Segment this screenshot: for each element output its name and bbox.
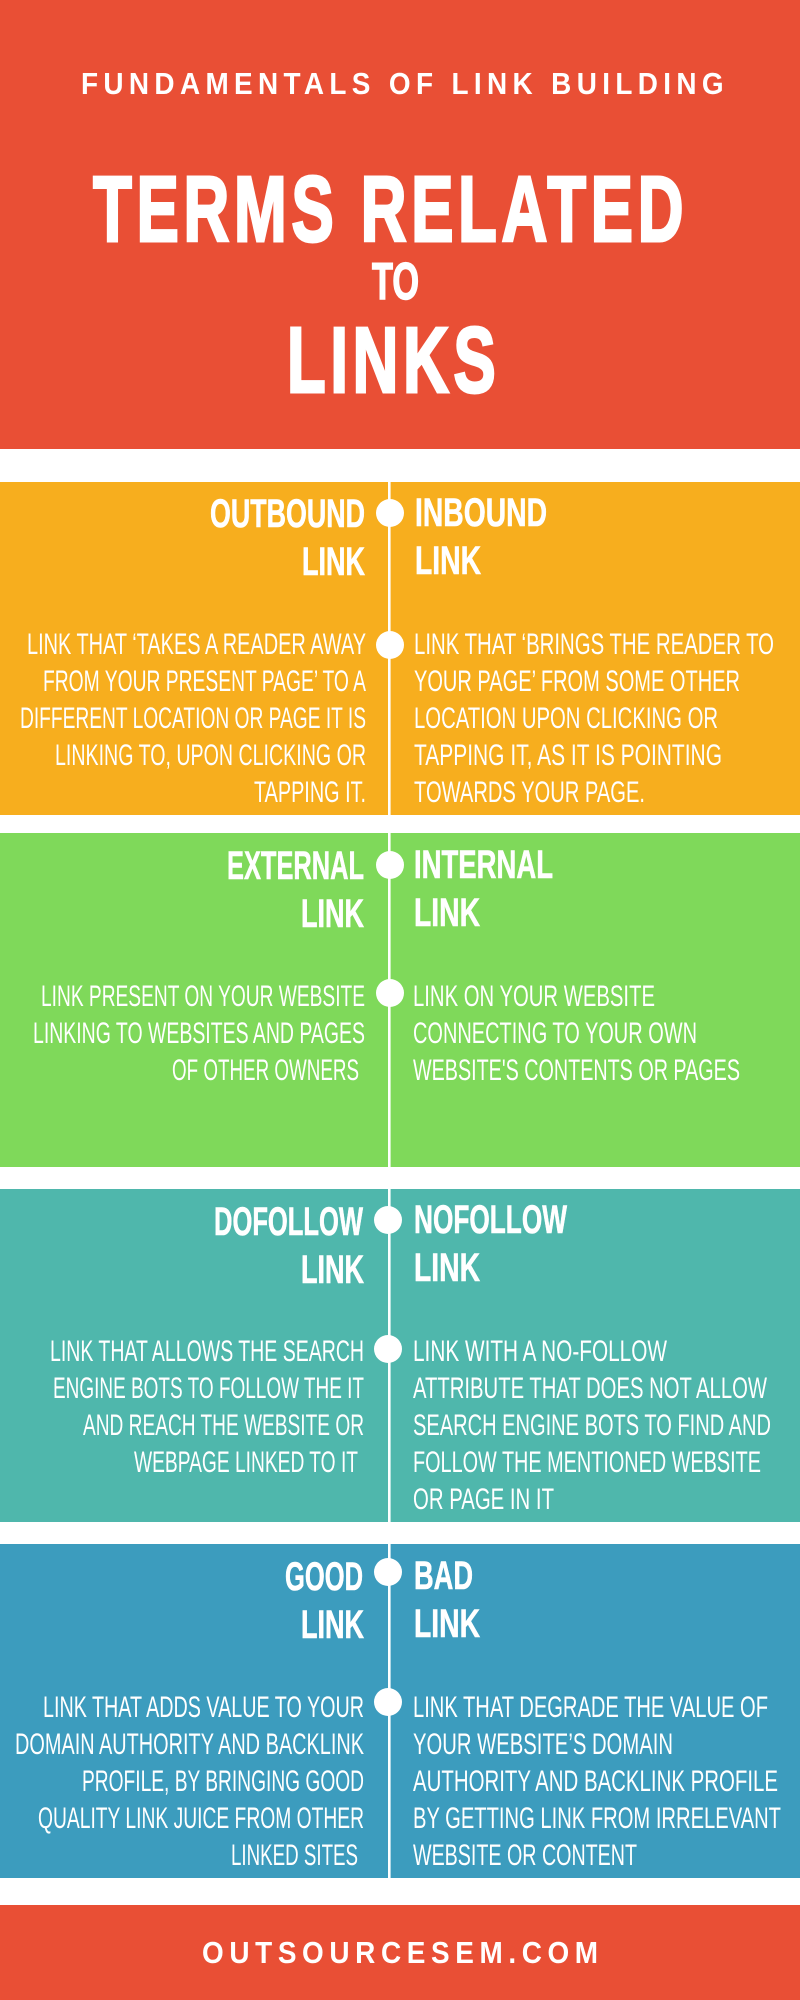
text: dofollow definition — [50, 1335, 364, 1479]
text: internal definition: LINK ON YOUR WEBSITE — [413, 980, 655, 1013]
text: bad definition: YOUR WEBSITE’S DOMAIN — [413, 1728, 673, 1761]
text: good definition: LINKED SITES — [231, 1839, 358, 1872]
heading: inbound link: INBOUND — [415, 491, 547, 535]
text: outbound definition: DIFFERENT LOCATION OR PAGE IT IS — [20, 702, 366, 735]
heading: bad link: BAD — [414, 1554, 473, 1598]
text: nofollow definition: LINK WITH A NO-FOLLOW — [413, 1335, 667, 1368]
marker: heading — [376, 851, 404, 879]
text: dofollow definition: LINK THAT ALLOWS THE SEARCH — [50, 1335, 364, 1368]
heading: external link: EXTERNAL — [227, 844, 364, 888]
text: inbound definition: TOWARDS YOUR PAGE. — [414, 776, 645, 809]
text: dofollow definition: ENGINE BOTS TO FOLLOW THE IT — [53, 1372, 364, 1405]
text: nofollow definition — [413, 1335, 771, 1516]
text: external definition: LINK PRESENT ON YOUR WEBSITE — [41, 980, 365, 1013]
heading: nofollow link — [414, 1198, 567, 1290]
text: external definition — [33, 980, 365, 1087]
text: outbound definition: LINKING TO, UPON CLICKING OR — [55, 739, 366, 772]
heading: inbound link — [415, 491, 547, 583]
marker: description — [376, 631, 404, 659]
subtitle: FUNDAMENTALS OF LINK BUILDING — [81, 67, 724, 101]
heading: good link: LINK — [301, 1603, 364, 1647]
panel: footer — [0, 1905, 800, 2000]
text: external definition: LINKING TO WEBSITES AND PAGES — [33, 1017, 365, 1050]
heading: internal link — [414, 843, 553, 935]
heading: outbound link — [210, 492, 365, 584]
text: good definition: QUALITY LINK JUICE FROM OTHER — [38, 1802, 364, 1835]
panel: dofollow vs nofollow link — [0, 1189, 800, 1522]
panel: good vs bad link — [0, 1544, 800, 1878]
panel: external vs internal link — [0, 833, 800, 1167]
marker: description — [374, 1688, 402, 1716]
heading: dofollow link — [214, 1200, 364, 1292]
text: outbound definition: LINK THAT ‘TAKES A READER AWAY — [27, 628, 366, 661]
text: dofollow definition: WEBPAGE LINKED TO IT — [134, 1446, 358, 1479]
text: good definition — [15, 1691, 364, 1872]
text: outbound definition: FROM YOUR PRESENT PAGE’ TO A — [43, 665, 366, 698]
text: bad definition — [413, 1691, 781, 1872]
heading: external link — [227, 844, 364, 936]
title line 3: LINKS — [287, 308, 496, 412]
heading: outbound link: LINK — [302, 540, 365, 584]
marker: description — [376, 979, 404, 1007]
text: dofollow definition: AND REACH THE WEBSITE OR — [83, 1409, 364, 1442]
heading: external link: LINK — [301, 892, 364, 936]
panel: header — [0, 0, 800, 449]
text: good definition: LINK THAT ADDS VALUE TO YOUR — [43, 1691, 364, 1724]
title line 2: TO — [372, 253, 419, 311]
text: inbound definition — [414, 628, 774, 809]
marker: description — [374, 1335, 402, 1363]
heading: nofollow link: NOFOLLOW — [414, 1198, 567, 1242]
heading: good link: GOOD — [285, 1555, 363, 1599]
heading: internal link: INTERNAL — [414, 843, 553, 887]
text: nofollow definition: OR PAGE IN IT — [413, 1483, 554, 1516]
text: good definition: PROFILE, BY BRINGING GOOD — [82, 1765, 364, 1798]
text: outbound definition — [20, 628, 366, 809]
heading: nofollow link: LINK — [414, 1246, 480, 1290]
title line 1: TERMS RELATED — [93, 157, 683, 261]
heading: good link — [285, 1555, 364, 1647]
heading: outbound link: OUTBOUND — [210, 492, 365, 536]
heading: bad link: LINK — [414, 1602, 480, 1646]
heading: dofollow link: LINK — [301, 1248, 364, 1292]
heading: inbound link: LINK — [415, 539, 481, 583]
text: bad definition: WEBSITE OR CONTENT — [413, 1839, 637, 1872]
text: internal definition — [413, 980, 740, 1087]
text: good definition: DOMAIN AUTHORITY AND BACKLINK — [15, 1728, 364, 1761]
marker: heading — [376, 499, 404, 527]
marker: heading — [374, 1558, 402, 1586]
heading: bad link — [414, 1554, 480, 1646]
heading: dofollow link: DOFOLLOW — [214, 1200, 363, 1244]
footer website text: OUTSOURCESEM.COM — [202, 1936, 598, 1970]
marker: heading — [374, 1206, 402, 1234]
text: external definition: OF OTHER OWNERS — [172, 1054, 359, 1087]
heading: internal link: LINK — [414, 891, 480, 935]
panel: outbound vs inbound link — [0, 482, 800, 815]
text: outbound definition: TAPPING IT. — [254, 776, 366, 809]
